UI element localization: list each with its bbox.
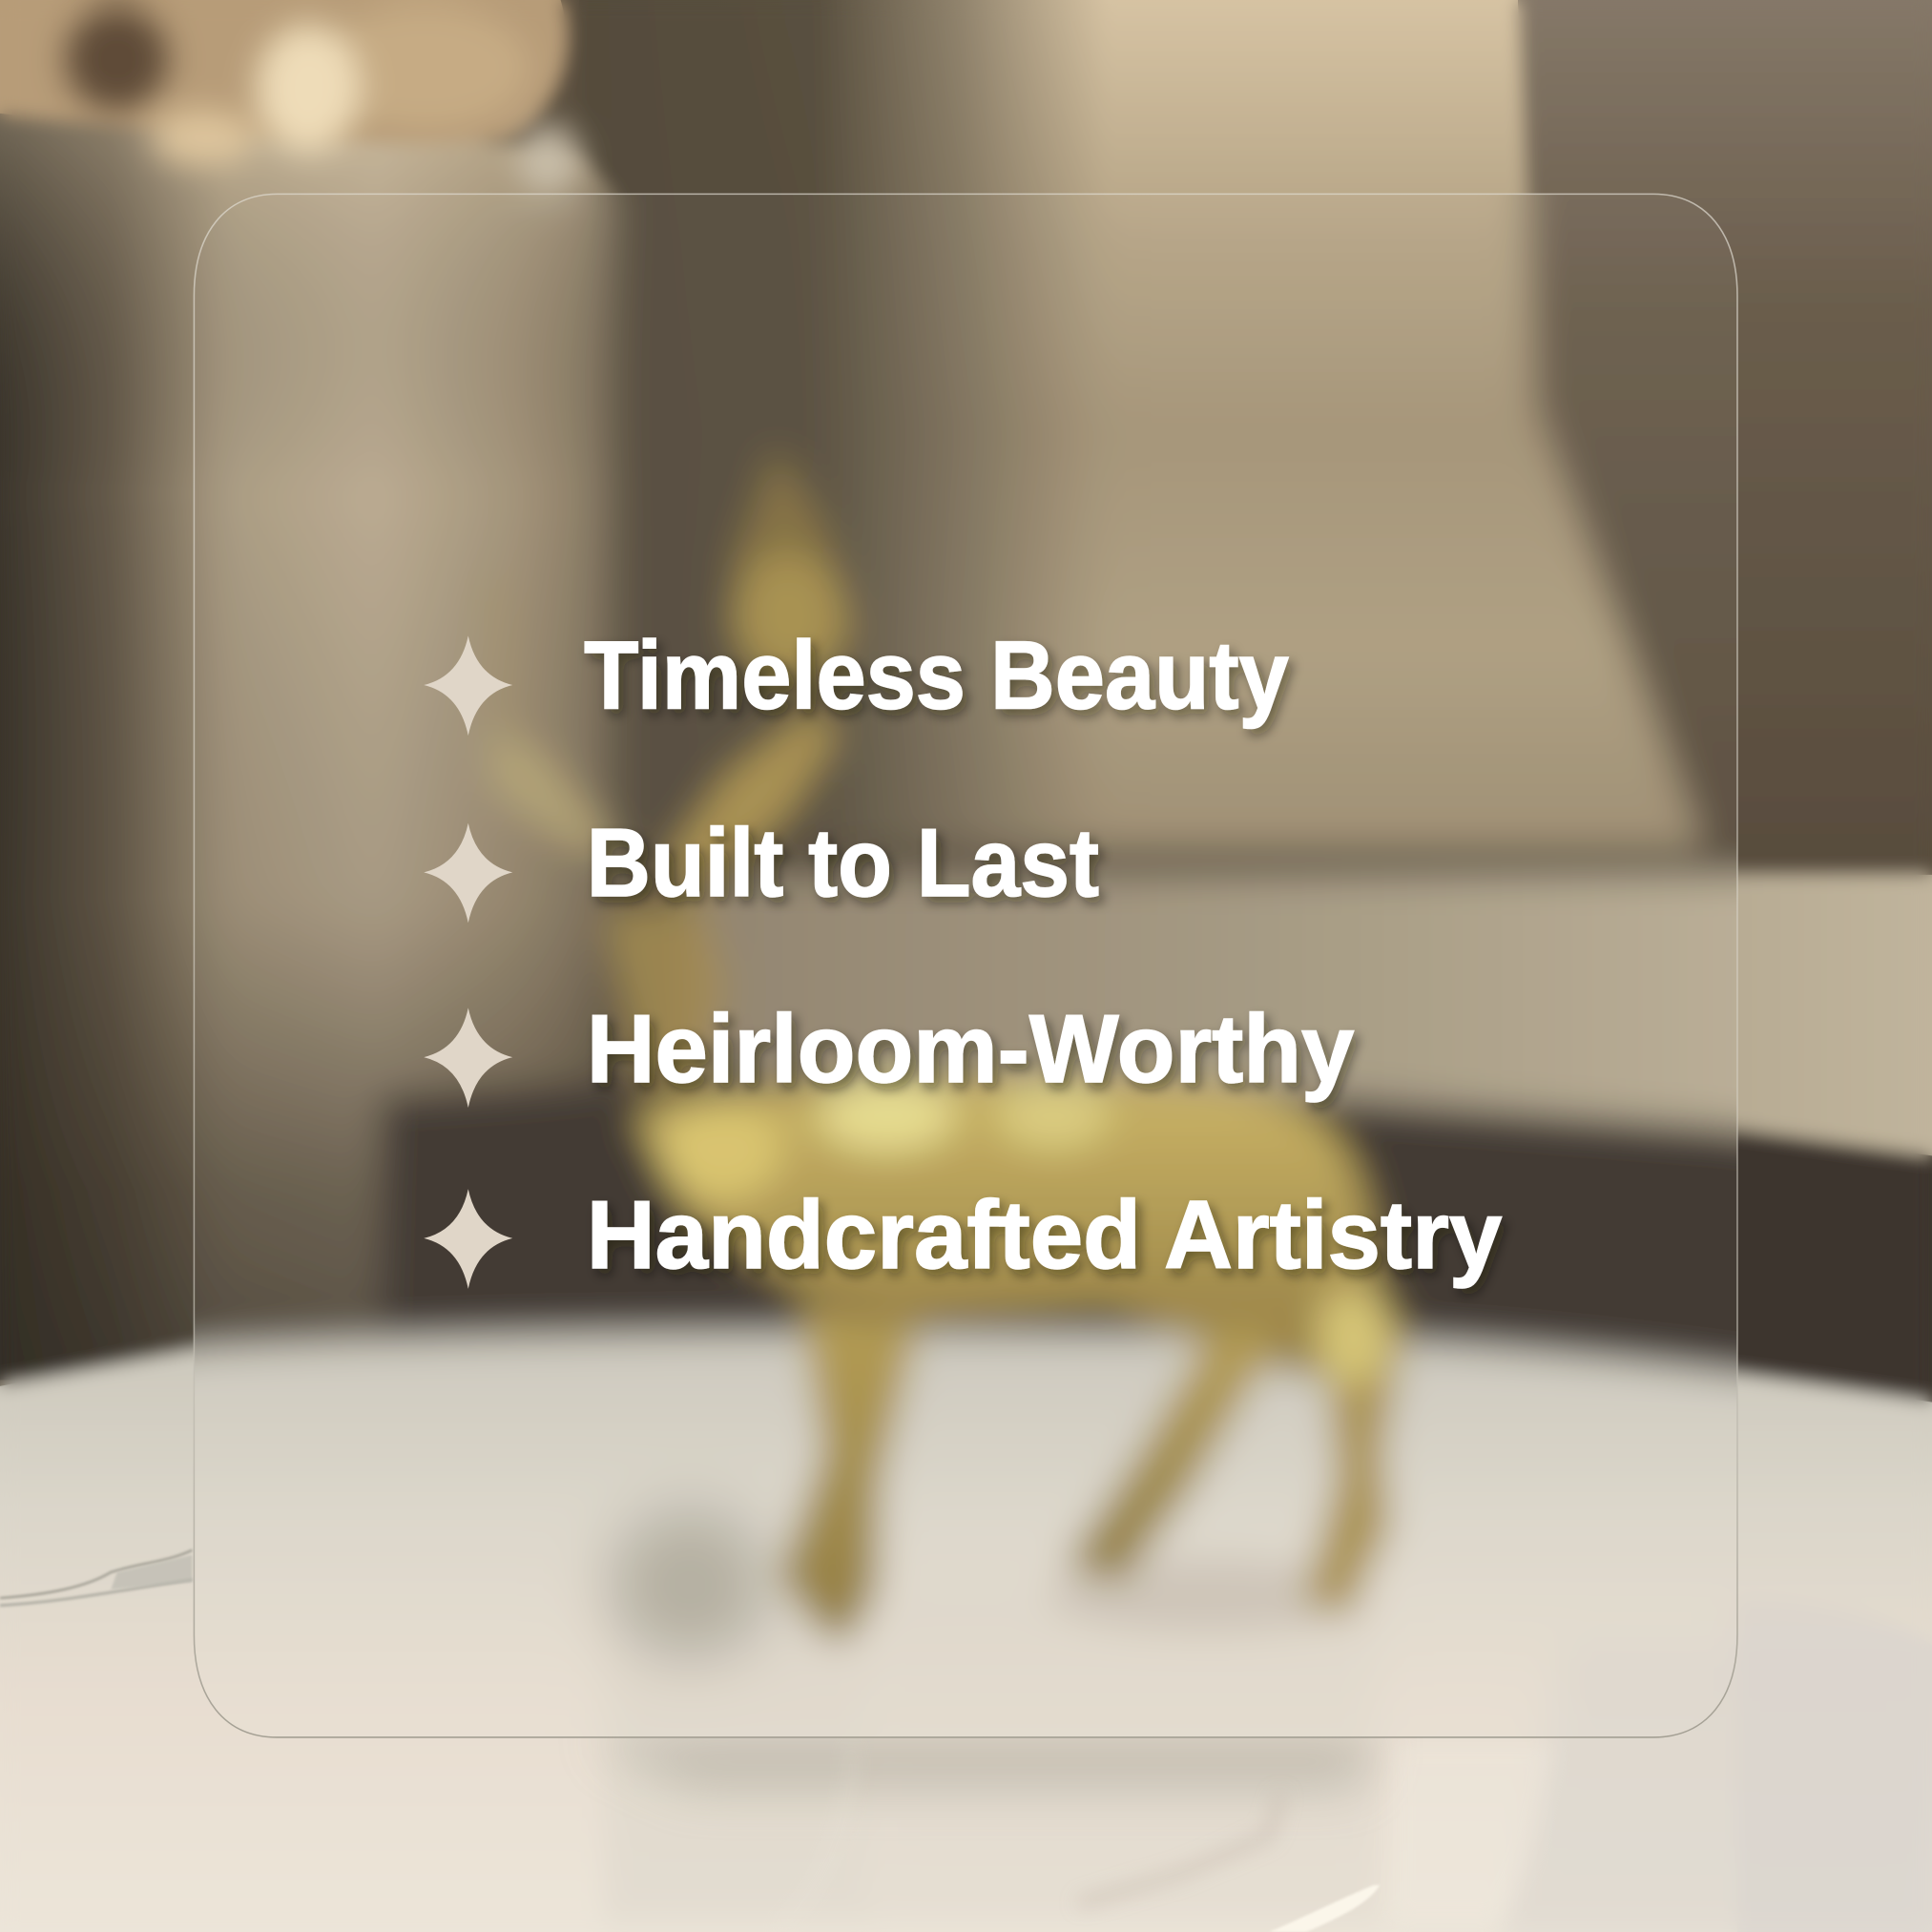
text: Handcrafted Artistry: Handcrafted Artistry: [587, 1182, 1502, 1289]
text: Built to Last: Built to Last: [587, 810, 1099, 917]
icon: sparkle 4: [424, 1189, 512, 1289]
icon: sparkle 1: [424, 635, 512, 736]
feature list: [424, 623, 1502, 1289]
panel: frosted glass card: [193, 193, 1738, 1738]
icon: sparkle 3: [424, 1008, 512, 1108]
text: Heirloom-Worthy: Heirloom-Worthy: [587, 996, 1354, 1103]
icon: sparkle 2: [424, 823, 512, 923]
text: Timeless Beauty: Timeless Beauty: [584, 623, 1289, 730]
marble details outside panel: [0, 1550, 1555, 1932]
